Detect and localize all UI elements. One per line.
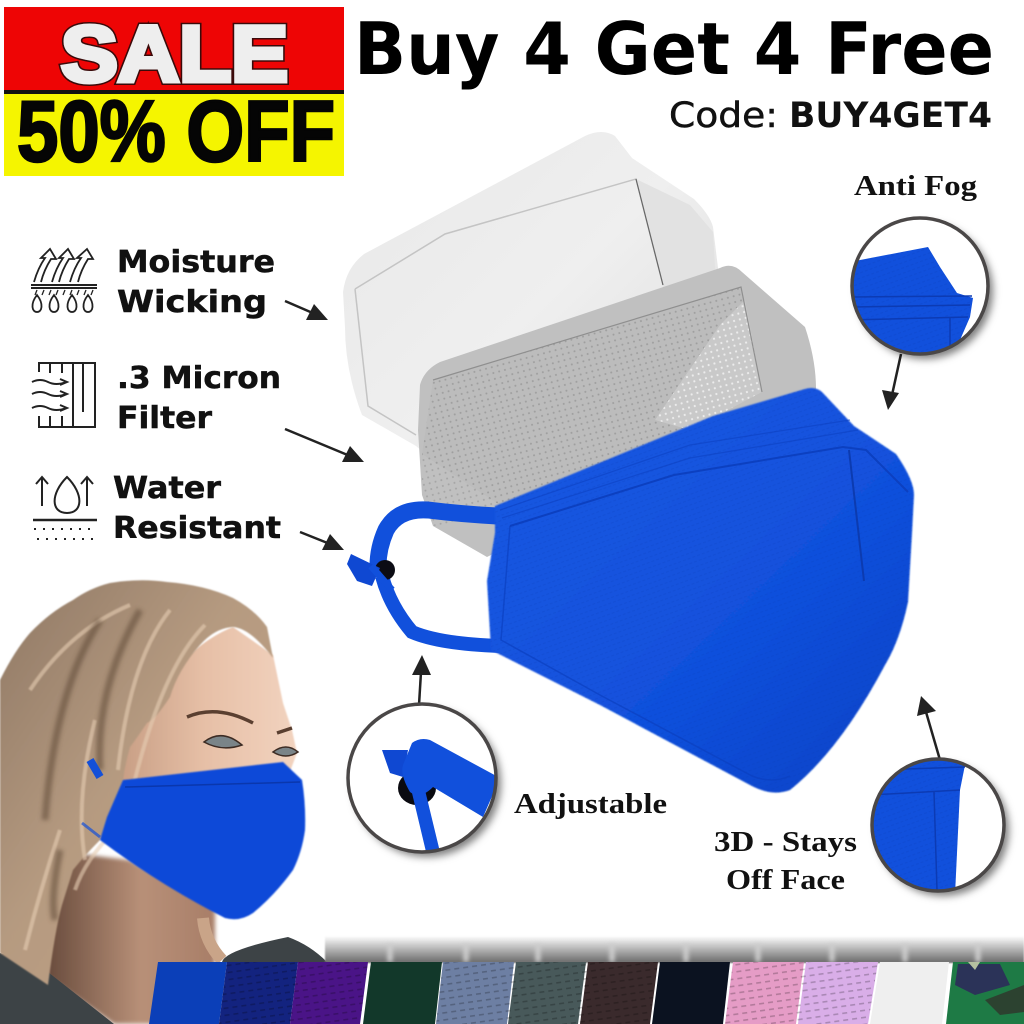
icon: filter [32,363,95,427]
sale banner: 50% OFF [17,84,335,180]
arrow: water resistant [300,532,344,550]
label: moisture wicking: Moisture [117,245,275,280]
icon: water resistant [33,477,97,539]
label: 3D stays off face: 3D - Stays [714,826,857,858]
arrow: anti fog [882,354,901,410]
callout: 3D stays off face [870,755,1004,895]
label: adjustable: Adjustable [514,788,667,820]
mask body [487,388,914,793]
label: 3D stays off face: Off Face [726,864,845,896]
callout: adjustable [348,704,500,856]
label: micron filter: Filter [117,401,212,436]
sale banner [4,7,344,180]
sale banner: SALE [61,9,288,98]
jacket [0,937,327,1024]
feature: micron filter [32,361,281,436]
arrow: 3D [917,696,940,760]
promo code: Code: [669,96,778,136]
color swatches [149,962,1024,1024]
blue mask with ear loop [347,388,914,793]
feature: water resistant [33,471,281,546]
label: moisture wicking: Wicking [117,285,267,320]
worn mask [90,760,100,777]
camo swatch [946,962,1024,1024]
color swatches shadow [325,936,1024,963]
hair [0,580,273,985]
ear loop strap [378,510,497,566]
white mask [343,132,718,500]
label: water resistant: Resistant [113,511,281,546]
arrow: filter [285,429,364,462]
face [110,627,297,830]
label: water resistant: Water [113,471,221,506]
sale banner: SALE [61,9,288,98]
icon: moisture wicking [31,249,97,312]
label: micron filter: .3 Micron [117,361,281,396]
strap toggle [375,560,395,580]
promo code: BUY4GET4 [789,96,992,136]
label: anti fog: Anti Fog [854,170,978,202]
arrow: adjustable [412,655,431,705]
feature: moisture wicking [31,245,275,320]
callout: anti fog [850,218,988,360]
arrow: moisture wicking [285,301,328,320]
headline: Buy 4 Get 4 Free [354,7,994,91]
neck and skin [30,850,215,1024]
woman wearing mask [0,580,327,1024]
eyes and brows [187,712,292,733]
gray mask [418,266,816,557]
